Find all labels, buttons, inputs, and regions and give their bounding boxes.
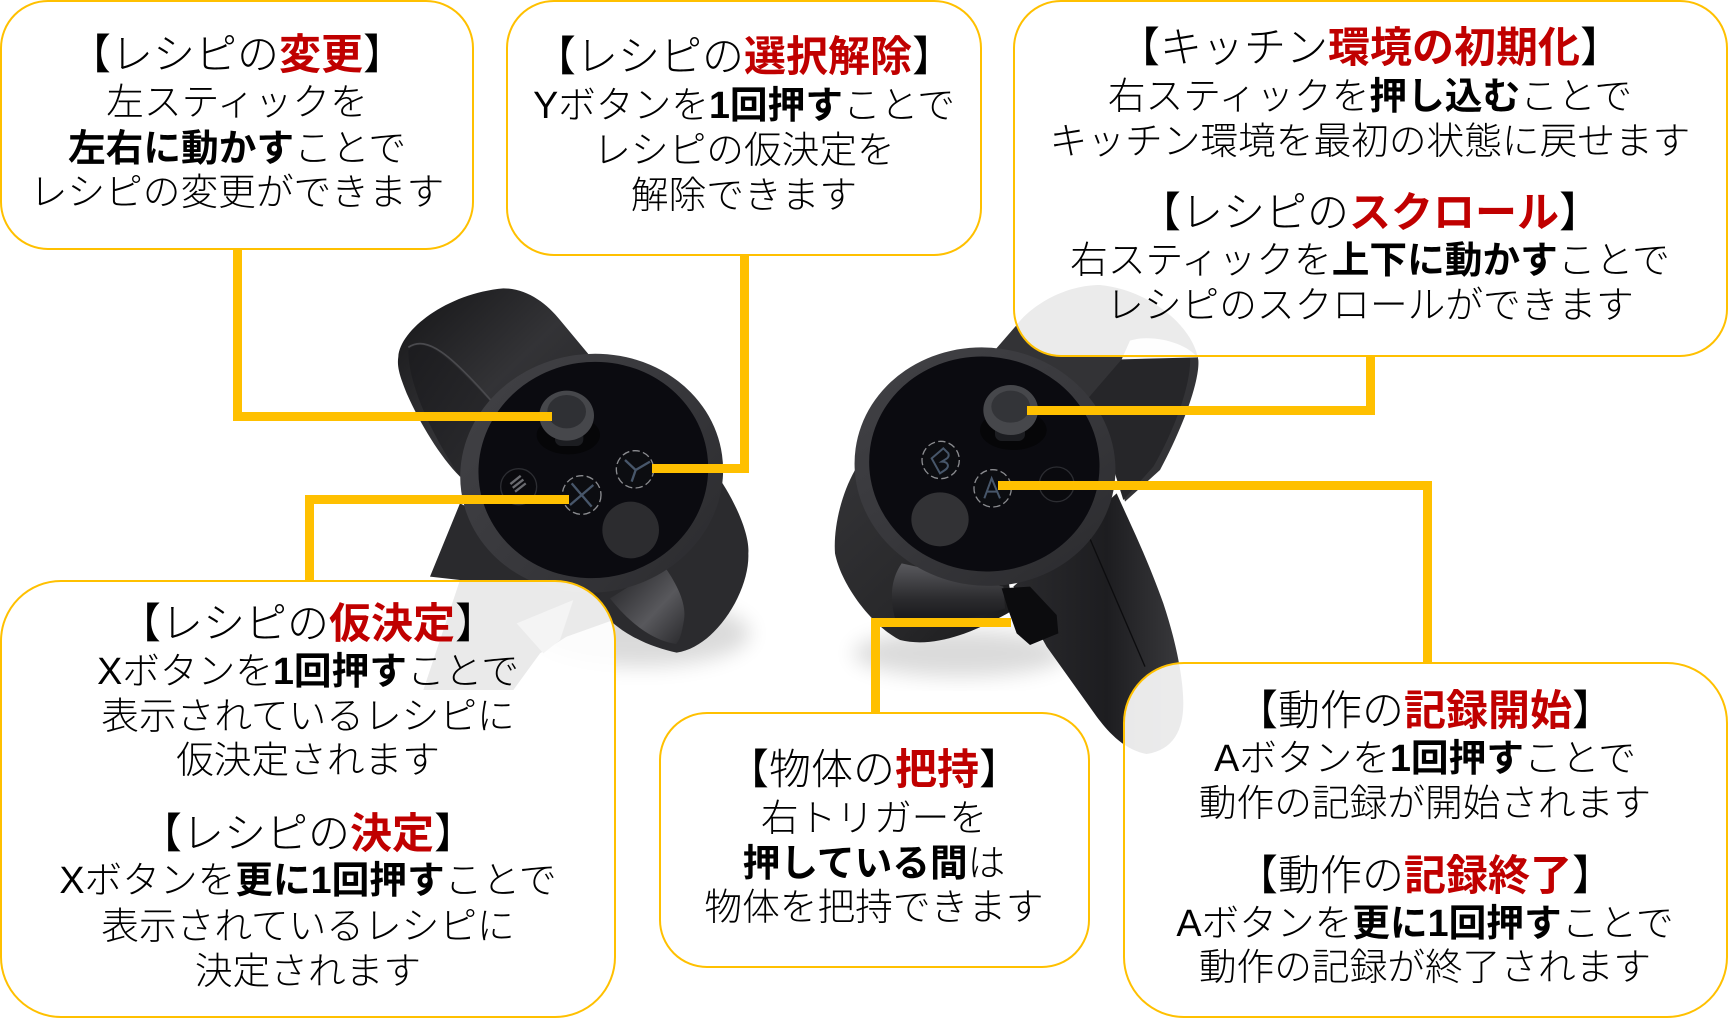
leader line: Y button (652, 255, 744, 468)
text block: tentative decision: 仮決定されます (176, 739, 440, 781)
text block: recipe deselect: レシピの仮決定を (593, 129, 895, 171)
text block: recipe deselect (533, 84, 955, 216)
text block: recipe change: 左スティックを (106, 81, 368, 123)
heading: object grasp: 【物体の把持】 (727, 746, 1021, 793)
text block: recording end (1176, 902, 1674, 988)
text block: object grasp: 物体を把持できます (704, 886, 1044, 928)
heading: recipe change: 【レシピの変更】 (69, 31, 405, 78)
panel: object grasp (660, 713, 1089, 967)
panel: recipe deselect (507, 1, 981, 255)
text block: object grasp: 押している間は (743, 842, 1005, 884)
text block: recipe change: 左右に動かすことで (68, 127, 406, 169)
text block: recipe scroll: 右スティックを上下に動かすことで (1070, 239, 1670, 281)
icon: thumb rest (602, 502, 659, 558)
heading: tentative decision: 【レシピの仮決定】 (119, 600, 497, 647)
panel: recipe change (1, 1, 473, 249)
text block: recipe change: レシピの変更ができます (30, 171, 444, 213)
icon: right trigger (1002, 587, 1058, 645)
heading: recording start: 【動作の記録開始】 (1236, 687, 1614, 734)
heading: final decision: 【レシピの決定】 (140, 810, 476, 857)
icon: left thumbstick (537, 391, 600, 454)
leader line: right trigger (876, 622, 1011, 713)
leader line: left stick (238, 248, 552, 416)
icon: A button (974, 470, 1011, 507)
text block: recording end: 動作の記録が終了されます (1199, 946, 1651, 988)
heading: recording end: 【動作の記録終了】 (1236, 852, 1614, 899)
text block: recording start (1199, 737, 1651, 824)
icon: thumb rest (911, 492, 969, 546)
text block: kitchen reset: 右スティックを押し込むことで (1108, 75, 1632, 117)
text block: recipe scroll (1070, 239, 1670, 326)
leader line: A button (998, 486, 1428, 663)
left controller photo (398, 288, 750, 690)
text block: recipe change (30, 81, 444, 213)
text block: tentative decision: Xボタンを1回押すことで (97, 650, 519, 692)
text block: tentative decision: 表示されているレシピに (101, 695, 515, 737)
leader line: X button (310, 500, 569, 581)
heading: kitchen reset: 【キッチン環境の初期化】 (1118, 24, 1622, 71)
text block: recording end: Aボタンを更に1回押すことで (1176, 902, 1674, 944)
icon: X button (562, 476, 601, 514)
text block: recipe deselect: Yボタンを1回押すことで (533, 84, 955, 126)
text block: recording start: 動作の記録が開始されます (1199, 782, 1651, 824)
text block: final decision: 表示されているレシピに (101, 905, 515, 947)
right controller photo (835, 285, 1198, 754)
text block: kitchen reset: キッチン環境を最初の状態に戻せます (1050, 120, 1690, 162)
text block: recipe scroll: レシピのスクロールができます (1106, 284, 1634, 326)
text block: final decision: Xボタンを更に1回押すことで (59, 859, 557, 901)
text block: final decision: 決定されます (195, 950, 421, 992)
leader line: right stick (1027, 356, 1370, 410)
heading: recipe deselect: 【レシピの選択解除】 (534, 33, 954, 80)
panel: kitchen reset and recipe scroll (1014, 1, 1727, 356)
text block: final decision (59, 859, 557, 992)
text block: tentative decision (97, 650, 519, 781)
text block: object grasp: 右トリガーを (761, 797, 987, 839)
panel: tentative and final decision (1, 581, 615, 1017)
icon: B button (922, 441, 959, 479)
icon: right thumbstick (980, 385, 1047, 450)
text block: recipe deselect: 解除できます (631, 174, 857, 216)
text block: recording start: Aボタンを1回押すことで (1214, 737, 1636, 779)
panel: motion recording (1124, 663, 1727, 1017)
icon: oculus button (1039, 467, 1074, 502)
text block: object grasp (704, 797, 1044, 928)
heading: recipe scroll: 【レシピのスクロール】 (1139, 189, 1601, 236)
text block: kitchen reset (1050, 75, 1690, 162)
icon: Y button (616, 451, 654, 488)
icon: menu button (501, 469, 537, 505)
